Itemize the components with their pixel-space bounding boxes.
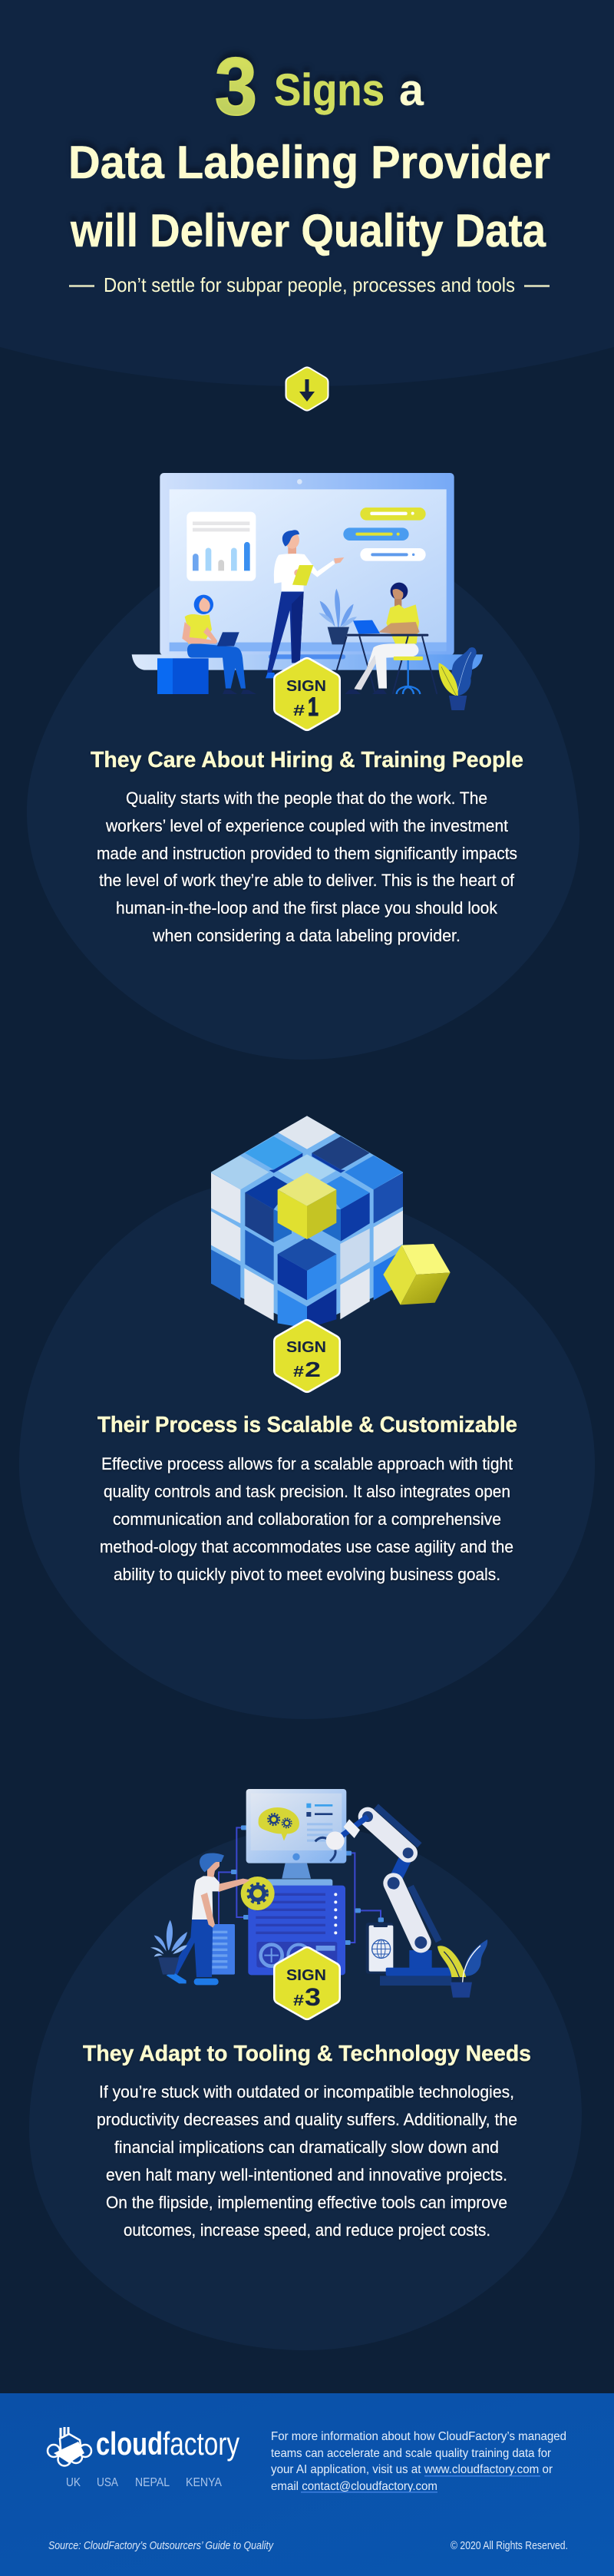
text block: sign 1: the level of work they’re able to deliver. This is the heart of xyxy=(99,871,515,890)
laptop xyxy=(132,473,483,670)
cube centre column xyxy=(278,1238,336,1328)
text block: sign 3: If you’re stuck with outdated or incompatible technologies, xyxy=(99,2082,514,2101)
badge: sign 2 xyxy=(280,1326,334,1386)
title xyxy=(68,41,550,256)
large yellow cube xyxy=(383,1244,451,1305)
badge: sign 2: # xyxy=(293,1364,304,1381)
call to action text: teams can accelerate and scale quality training data for xyxy=(271,2447,552,2460)
badge: sign 3 xyxy=(280,1953,334,2013)
text block: sign 3: even halt many well-intentioned and innovative projects. xyxy=(106,2165,507,2184)
text block: sign 3: financial implications can dramatically slow down and xyxy=(114,2138,499,2157)
office locations: KENYA xyxy=(186,2476,222,2489)
plant on screen xyxy=(319,589,357,644)
left plant xyxy=(150,1920,187,1975)
chart card xyxy=(187,512,256,581)
background shape: top arc xyxy=(0,0,614,386)
cube right faces xyxy=(322,1172,403,1319)
cube left faces xyxy=(211,1172,292,1321)
heading: sign 2: Their Process is Scalable & Customizable xyxy=(97,1413,517,1437)
title numeral: 3 xyxy=(215,41,257,132)
call to action text: For more information about how CloudFactory’s managed xyxy=(271,2430,566,2443)
badge: sign 3: # xyxy=(293,1992,304,2009)
title line 3: will Deliver Quality Data xyxy=(70,205,546,256)
badge: sign 1: # xyxy=(293,703,305,719)
seated man at desk xyxy=(337,583,437,694)
icon: down arrow badge xyxy=(292,373,322,405)
badge: sign 2: SIGN xyxy=(286,1339,326,1356)
icon: factory on cloud xyxy=(48,2427,91,2466)
badge: sign 1: SIGN xyxy=(286,678,326,695)
wordmark: cloud: cloud xyxy=(96,2426,163,2462)
text block: sign 2: communication and collaboration for a comprehensive xyxy=(113,1510,501,1529)
text block: sign 1: human-in-the-loop and the first place you should look xyxy=(116,898,498,918)
phone xyxy=(366,1923,394,1974)
title word: Signs: Signs xyxy=(274,65,385,115)
text block: sign 1: when considering a data labeling provider. xyxy=(152,926,460,945)
cube top faces xyxy=(211,1116,403,1209)
title line 2: Data Labeling Provider xyxy=(68,137,550,188)
badge: sign 1 xyxy=(280,664,334,724)
badge: sign 2: 2 xyxy=(305,1357,321,1381)
text block: sign 3: On the flipside, implementing effective tools can improve xyxy=(106,2193,507,2212)
cube body xyxy=(211,1116,403,1328)
badge: sign 3: SIGN xyxy=(286,1967,326,1984)
illustration: technology stack with robot arm xyxy=(150,1789,487,1998)
connectors xyxy=(219,1827,381,1943)
office locations xyxy=(66,2476,222,2489)
text block: sign 1 xyxy=(97,789,517,945)
text block: sign 2: ability to quickly pivot to meet evolving business goals. xyxy=(114,1565,500,1584)
office locations: UK xyxy=(66,2476,81,2489)
text block: sign 1: workers’ level of experience coupled with the investment xyxy=(105,816,508,835)
text block: sign 1: made and instruction provided to them significantly impacts xyxy=(97,844,517,863)
footer panel xyxy=(0,2393,614,2576)
floor plant xyxy=(439,647,477,710)
illustration: team presenting in front of laptop xyxy=(132,473,483,710)
call to action text: your AI application, visit us at www.cloudfactory.com or xyxy=(271,2463,553,2476)
text block: sign 3 xyxy=(97,2082,517,2240)
engineer with gear xyxy=(167,1853,275,1985)
call to action text: email contact@cloudfactory.com xyxy=(271,2480,437,2493)
text block: sign 3: productivity decreases and quality suffers. Additionally, the xyxy=(97,2110,517,2129)
badge: sign 3: 3 xyxy=(305,1983,321,2011)
subtitle: Don’t settle for subpar people, processes and tools xyxy=(104,273,515,296)
chat pills xyxy=(343,508,426,561)
right plant xyxy=(437,1939,487,1998)
logo: cloudfactory xyxy=(48,2426,239,2466)
badge: sign 1: 1 xyxy=(308,693,319,722)
text block: sign 2: quality controls and task precision. It also integrates open xyxy=(104,1482,510,1501)
heading: sign 3: They Adapt to Tooling & Technology Needs xyxy=(83,2042,531,2066)
seated woman with laptop xyxy=(157,595,256,694)
text block: sign 1: Quality starts with the people that do the work. The xyxy=(126,789,487,808)
text block: sign 2 xyxy=(100,1454,513,1584)
connector nodes xyxy=(231,1825,384,1945)
background shape: section 1 blob xyxy=(27,530,579,1060)
robot arm xyxy=(315,1807,452,1986)
wordmark: factory: factory xyxy=(163,2426,239,2462)
heading: sign 1: They Care About Hiring & Training People xyxy=(91,748,523,772)
illustration: blue and white data cube xyxy=(211,1116,451,1328)
text block: sign 2: method-ology that accommodates use case agility and the xyxy=(100,1537,513,1556)
background shape: section 2 blob xyxy=(19,1181,595,1719)
server xyxy=(248,1879,345,1975)
text block: sign 3: outcomes, increase speed, and reduce project costs. xyxy=(124,2221,490,2240)
copyright: © 2020 All Rights Reserved. xyxy=(451,2539,568,2552)
standing presenter xyxy=(266,530,344,678)
text block: sign 2: Effective process allows for a scalable approach with tight xyxy=(101,1454,513,1473)
call to action text xyxy=(271,2430,566,2493)
monitor xyxy=(246,1789,346,1879)
source note: Source: CloudFactory’s Outsourcers’ Guide to Quality xyxy=(48,2539,274,2552)
small yellow cube xyxy=(278,1172,336,1239)
background shape: section 3 blob xyxy=(29,1826,582,2350)
title word: a: a xyxy=(399,65,424,115)
office locations: USA xyxy=(97,2476,118,2489)
office locations: NEPAL xyxy=(135,2476,170,2489)
